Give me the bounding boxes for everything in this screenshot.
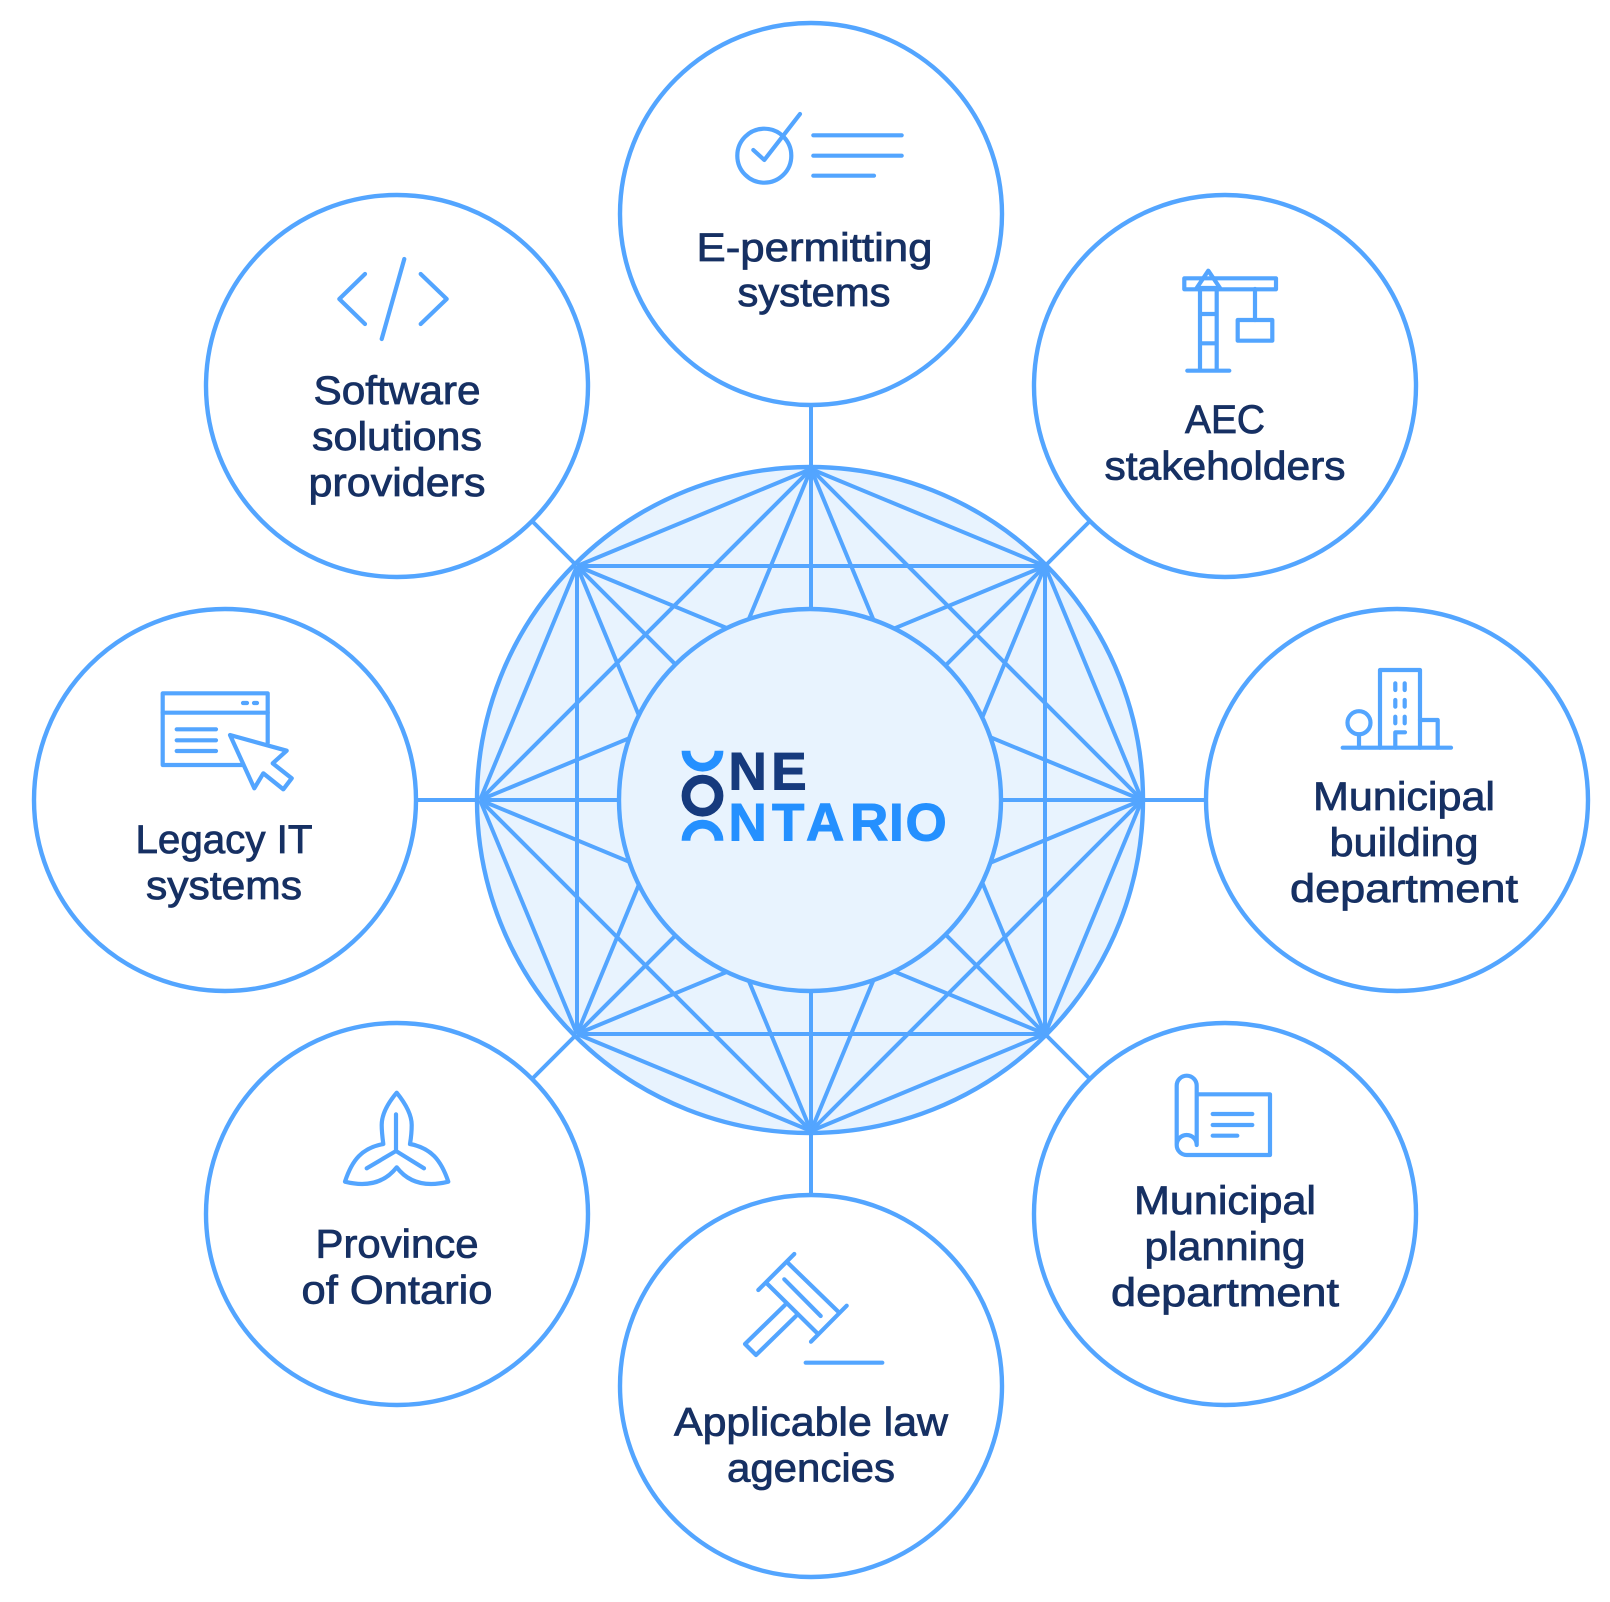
label: building — [1330, 821, 1478, 865]
icon: tower crane — [1184, 271, 1276, 371]
logo middle ring — [686, 779, 719, 812]
label: Province — [316, 1222, 478, 1266]
icon: trillium — [345, 1093, 448, 1184]
label — [308, 369, 486, 505]
label: Legacy IT — [136, 818, 312, 862]
node: Province of Ontario — [206, 1023, 588, 1405]
logo word NTARIO: NTARIO — [728, 794, 947, 853]
label: department — [1111, 1271, 1339, 1315]
icon: browser window with cursor — [163, 693, 292, 789]
label: planning — [1144, 1225, 1306, 1269]
node: E-permitting systems — [620, 23, 1002, 405]
label: systems — [146, 864, 302, 908]
label: Applicable law — [674, 1400, 948, 1444]
node: Applicable law agencies — [620, 1195, 1002, 1577]
node: Municipal building department — [1206, 609, 1588, 991]
label: department — [1290, 867, 1518, 911]
logo word NE: NE — [728, 742, 807, 801]
node: Software solutions providers — [206, 195, 588, 577]
icon: gavel — [745, 1254, 882, 1363]
label: agencies — [727, 1446, 895, 1490]
label: E-permitting — [696, 226, 932, 270]
label: systems — [738, 271, 890, 315]
label — [1111, 1179, 1339, 1315]
connector lines between hub and outer circles — [416, 405, 1206, 1195]
logo top half ring — [686, 751, 719, 767]
label: solutions — [312, 415, 482, 459]
label: AEC — [1185, 398, 1265, 442]
label: Municipal — [1134, 1179, 1316, 1223]
icon: blueprint scroll — [1177, 1076, 1270, 1155]
logo bottom half ring — [686, 824, 719, 841]
label — [696, 226, 932, 315]
hub outer circle — [477, 467, 1143, 1133]
label: stakeholders — [1104, 444, 1346, 488]
label — [302, 1222, 492, 1312]
label — [674, 1400, 948, 1490]
central network hub — [477, 467, 1143, 1133]
label: Municipal — [1313, 775, 1495, 819]
label — [1290, 775, 1518, 911]
label — [136, 818, 312, 908]
icon: checklist — [737, 114, 902, 183]
label: providers — [308, 461, 486, 505]
icon: code brackets — [339, 259, 447, 339]
label: Software — [314, 369, 480, 413]
node: Municipal planning department — [1034, 1023, 1416, 1405]
node: AEC stakeholders — [1034, 195, 1416, 577]
node: Legacy IT systems — [34, 609, 416, 991]
icon: buildings and tree — [1343, 670, 1451, 748]
label: of Ontario — [302, 1268, 492, 1312]
logo: One Ontario — [686, 742, 947, 853]
hub inner circle — [619, 609, 1001, 991]
star mesh of lines — [480, 469, 1142, 1131]
label — [1104, 398, 1346, 488]
